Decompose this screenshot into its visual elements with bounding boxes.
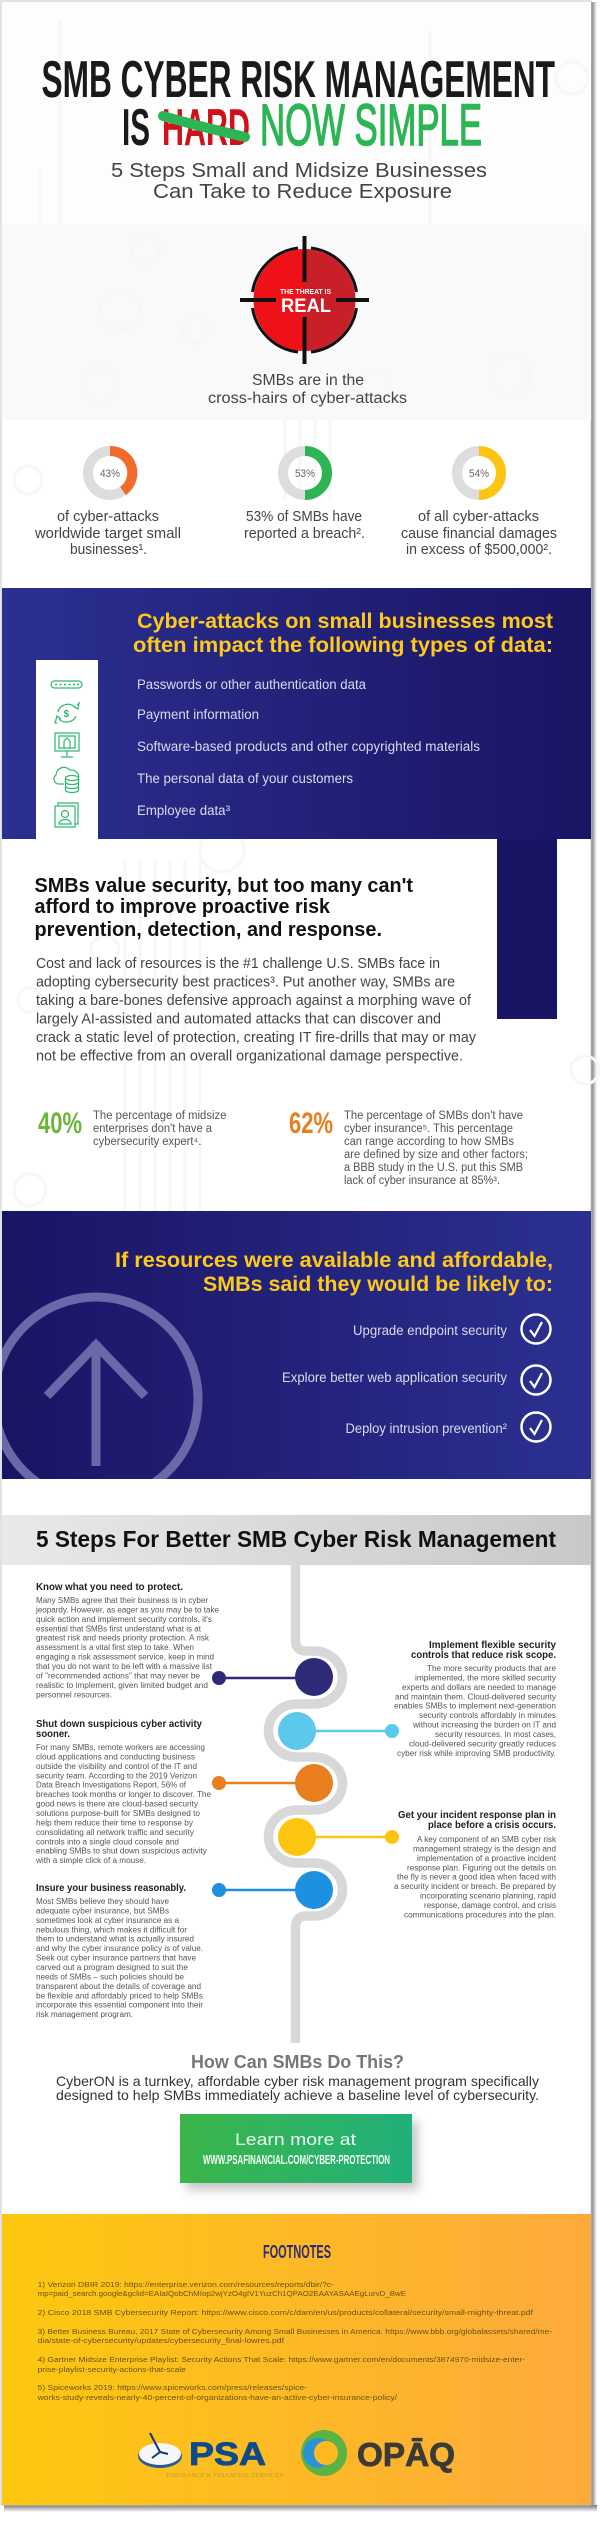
step: insure your business: Insure your business reasonably. [36, 1882, 186, 1894]
step body: and maintain them. Cloud-delivered security [395, 1692, 556, 1701]
title word: HARD crossed out [162, 99, 250, 157]
step body: of "recommended actions" that may never be [36, 1671, 201, 1680]
diagram: winding step path [212, 1565, 399, 2043]
heading band: 5 steps [2, 1515, 591, 1565]
data type list [137, 677, 480, 818]
step body: Many SMBs agree that their business is in cyber [36, 1596, 208, 1605]
node: step three [212, 1764, 333, 1802]
step body: communications procedures into the plan. [404, 1910, 556, 1919]
footnote 4: 4) Gartner Midsize Enterprise Playlist: Security Actions That Scale: https://www.gartner.com/en/documents/3874970-midsize-enter- [38, 2355, 526, 2364]
step: know what you need to protect: Know what you need to protect. [36, 1581, 183, 1593]
caption: in excess of $500,000². [406, 542, 552, 558]
stat: 43 percent [34, 451, 181, 558]
data type list: Software-based products and other copyrighted materials [137, 739, 480, 754]
step body: sometimes look at cyber insurance as a [36, 1916, 180, 1925]
footnote 5 [36, 2383, 398, 2402]
heading [133, 610, 553, 657]
text: CyberON description: CyberON is a turnkey, affordable cyber risk management program specifically [56, 2073, 539, 2089]
paragraph: cost and resources: adopting cybersecurity best practices³. Put another way, SMBs are [36, 974, 455, 990]
step: incident response plan: place before a crisis occurs. [428, 1819, 556, 1831]
caption: of cyber-attacks [57, 509, 159, 525]
step body: implemented, the more skilled security [415, 1673, 556, 1682]
step body: enabling SMBs to shut down suspicious activity [36, 1847, 207, 1856]
stat text [93, 1110, 226, 1148]
logo: OPAQ: OPĀQ [357, 2436, 455, 2473]
step body: Seek out cyber insurance partners that have [36, 1954, 197, 1963]
icon column [36, 660, 98, 839]
step body: greatest risk and needs priority protection. A risk [36, 1634, 210, 1643]
step body: consolidating all network traffic and security [36, 1828, 194, 1837]
caption: cause financial damages [401, 526, 557, 542]
panel: footnotes [2, 2214, 591, 2505]
step body [35, 1596, 220, 1699]
footnote 2: 2) Cisco 2018 SMB Cybersecurity Report: https://www.cisco.com/c/dam/en/us/products/collateral/security/small-mighty-threat.pdf [38, 2308, 534, 2317]
icon: up arrow in circle [0, 1297, 198, 1501]
subtitle: Can Take to Reduce Exposure [153, 181, 452, 203]
step body: essential that SMBs first understand what is at [36, 1624, 202, 1633]
step body: breaches took months or longer to discover. The [36, 1790, 212, 1799]
paragraph: cost and resources: Cost and lack of resources is the #1 challenge U.S. SMBs face in [36, 956, 440, 972]
step body [394, 1835, 557, 1919]
heading [115, 1249, 553, 1296]
stat text: The percentage of midsize [93, 1110, 226, 1122]
logo: PSA: PSA [189, 2436, 266, 2472]
step body: controls into a single cloud console and [36, 1837, 179, 1846]
step body: and why the cyber insurance policy is of value. [36, 1944, 203, 1953]
caption: 53% of SMBs have [246, 509, 362, 525]
footnote 1 [38, 2280, 406, 2298]
step body: carved out a program designed to suit the [36, 1963, 189, 1972]
step body [35, 1743, 212, 1865]
action: intrusion prevention: Deploy intrusion prevention² [346, 1421, 507, 1436]
footnote 3: dia/state-of-cybersecurity/updates/cybersecurity_final-lowres.pdf [38, 2336, 285, 2345]
caption: businesses¹. [70, 542, 147, 558]
step body: experts and dollars are needed to manage [402, 1683, 557, 1692]
stat text: The percentage of SMBs don't have [344, 1110, 523, 1122]
step body: nebulous thing, which makes it difficult for [36, 1925, 187, 1934]
step body: incorporate this essential component into their [36, 2001, 203, 2010]
step: implement flexible controls: Implement flexible security [429, 1639, 556, 1651]
step: know what you need to protect [35, 1581, 220, 1699]
action: intrusion prevention [346, 1412, 550, 1442]
title word: IS: IS [122, 99, 150, 157]
decorative navy bar [497, 839, 557, 1019]
step: incident response plan [394, 1809, 557, 1919]
step body: management strategy is the design and [413, 1844, 556, 1853]
caption [401, 509, 557, 558]
footnote 3 [38, 2327, 553, 2345]
paragraph: cost and resources: taking a bare-bones defensive approach against a morphing wave of [36, 993, 472, 1009]
step body: For many SMBs, remote workers are accessing [36, 1743, 205, 1752]
icon: target with threat is real [240, 236, 369, 364]
icon: payment: $ [64, 709, 70, 720]
footnote 5: works-study-reveals-nearly-40-percent-of-organizations-have-an-active-cyber-insurance-policy/ [36, 2393, 398, 2402]
caption [34, 509, 181, 558]
stat: 62 percent [289, 1107, 528, 1187]
donut: 54%: 54% [469, 468, 489, 480]
target caption: SMBs are in the [252, 372, 364, 389]
action: web application security: Explore better web application security [282, 1370, 507, 1385]
step: implement flexible controls: controls that reduce risk scope. [411, 1649, 556, 1661]
step body: Most SMBs believe they should have [36, 1897, 170, 1906]
icon: cloud database [54, 767, 79, 792]
icon: employee card [55, 803, 78, 827]
step body: security resources. In most cases, [435, 1730, 556, 1739]
stat: 54 percent [401, 451, 557, 558]
button: learn more: WWW.PSAFINANCIAL.COM/CYBER-PROTECTION [203, 2153, 390, 2167]
stat text: enterprises don't have a [93, 1123, 213, 1135]
step body: risk management program. [36, 2010, 133, 2019]
paragraph: cost and resources [36, 956, 477, 1064]
title [42, 51, 555, 158]
data type list: The personal data of your customers [137, 771, 353, 786]
step body: adequate cyber insurance, but SMBs [36, 1906, 169, 1915]
icon: password [51, 681, 82, 688]
heading: how can SMBs do this: How Can SMBs Do This? [191, 2052, 404, 2072]
button: learn more [180, 2114, 412, 2183]
step body: implementation of a proactive incident [417, 1854, 557, 1863]
node: step four [278, 1818, 399, 1856]
step body: cloud applications and conducting business [36, 1752, 195, 1761]
logo: PSA [138, 2433, 283, 2479]
paragraph: cost and resources: not be effective from an overall organizational damage perspective. [36, 1048, 463, 1064]
step: shut down suspicious activity: Shut down suspicious cyber activity [36, 1718, 202, 1730]
step body: Data Breach Investigations Report, 56% of [36, 1781, 187, 1790]
donut: 43%: 43% [100, 468, 120, 480]
step body: realistic to implement, given limited budget and [36, 1681, 208, 1690]
step: implement flexible controls [394, 1639, 557, 1758]
step body: assessment is a vital first step to take. When [36, 1643, 194, 1652]
step: shut down suspicious activity [35, 1718, 212, 1865]
paragraph: cost and resources: crack a static level of protection, creating IT fire-drills that may or may [36, 1030, 477, 1046]
stat: 40 percent: 40% [38, 1107, 82, 1140]
action: upgrade endpoint [353, 1314, 550, 1344]
step body: them to understand what is actually insured [36, 1935, 194, 1944]
node: step five [212, 1871, 333, 1909]
heading: Cyber-attacks on small businesses most [137, 610, 553, 633]
step body: enables SMBs to implement next-generation [394, 1702, 556, 1711]
step body: help them reduce their time to response by [36, 1818, 193, 1827]
subtitle [111, 160, 487, 203]
step body: be flexible and affordably priced to help SMBs [36, 1991, 203, 2000]
stat text: cyber insurance⁵. This percentage [344, 1123, 513, 1135]
step body: incorporating scenario planning, rapid [420, 1892, 556, 1901]
title word: HARD crossed out: HARD [162, 99, 250, 157]
stat: 40 percent [38, 1107, 226, 1148]
heading: If resources were available and affordable, [115, 1249, 553, 1272]
caption [244, 509, 365, 542]
logo: OPAQ [301, 2430, 455, 2476]
target caption: cross-hairs of cyber-attacks [208, 390, 407, 407]
logo: PSA: INSURANCE & FINANCIAL SERVICES [166, 2472, 283, 2479]
caption: of all cyber-attacks [418, 509, 539, 525]
heading: SMBs value security: SMBs value security, but too many can't [34, 875, 413, 897]
donut: 53%: 53% [295, 468, 315, 480]
step body: with a simple click of a mouse. [35, 1856, 146, 1865]
caption: reported a breach². [244, 526, 365, 542]
paragraph: cost and resources: largely AI-assisted and automated attacks that can discover and [36, 1012, 441, 1028]
data type list: Passwords or other authentication data [137, 677, 366, 692]
step body: jeopardy. However, as eager as you may be to take [35, 1605, 220, 1614]
icon: target with threat is real: REAL [281, 296, 331, 317]
icon: payment [55, 703, 79, 723]
step body: security team. According to the 2019 Verizon [36, 1771, 197, 1780]
stat text: can range according to how SMBs [344, 1136, 514, 1148]
caption: worldwide target small [34, 526, 181, 542]
stat text: a BBB study in the U.S. put this SMB [344, 1162, 523, 1174]
step body: outside the visibility and control of the IT and [36, 1762, 197, 1771]
node: step one [212, 1658, 333, 1696]
step body: solutions purpose-built for SMBs designed to [36, 1809, 201, 1818]
heading: SMBs said they would be likely to: [203, 1273, 553, 1296]
footnote 1: 1) Verizon DBIR 2019: https://enterprise.verizon.com/resources/reports/dbir/?c- [38, 2280, 335, 2289]
step body: a security incident or breach. Be prepared by [394, 1882, 556, 1891]
step body: The more security products that are [427, 1664, 557, 1673]
heading: often impact the following types of data: [133, 634, 553, 657]
step: incident response plan: Get your incident response plan in [398, 1809, 556, 1821]
step body: A key component of an SMB cyber risk [417, 1835, 557, 1844]
stat text: lack of cyber insurance at 85%³. [344, 1175, 500, 1187]
donut: 43% [88, 451, 132, 495]
stat text: are defined by size and other factors; [344, 1149, 528, 1161]
target caption [208, 372, 407, 407]
subtitle: 5 Steps Small and Midsize Businesses [111, 160, 487, 182]
heading: SMBs value security: prevention, detection, and response. [34, 919, 382, 941]
step body: needs of SMBs – such policies should be [36, 1972, 185, 1981]
step body: transparent about the details of coverage and [36, 1982, 201, 1991]
icon: target with threat is real: THE THREAT IS [280, 289, 331, 296]
footnote 3: 3) Better Business Bureau, 2017 State of Cybersecurity Among Small Businesses in America: https://www.bbb.org/globalassets/shared/me- [38, 2327, 553, 2336]
footnote 5: 5) Spiceworks 2019: https://www.spiceworks.com/press/releases/spice- [38, 2383, 308, 2392]
text: CyberON description [56, 2073, 539, 2103]
footnotes heading: FOOTNOTES [263, 2241, 331, 2262]
donut: 54% [457, 451, 501, 495]
stat text: cybersecurity expert⁴. [93, 1136, 202, 1148]
node: step two [278, 1712, 399, 1750]
step body: without increasing the burden on IT and [412, 1721, 556, 1730]
step body: security controls affordably in minutes [419, 1711, 556, 1720]
heading: SMBs value security [34, 875, 413, 941]
heading band: 5 steps: 5 Steps For Better SMB Cyber Risk Management [36, 1526, 556, 1552]
panel: data types [2, 588, 591, 839]
step body: engaging a risk assessment service, keep in mind [36, 1653, 214, 1662]
heading: SMBs value security: afford to improve proactive risk [34, 896, 331, 918]
stat text [344, 1110, 528, 1187]
footnote 4: prise-playlist-security-actions-that-scale [38, 2365, 186, 2374]
text: CyberON description: designed to help SMBs immediately achieve a baseline level of cybersecurity. [56, 2087, 539, 2103]
step body: cyber risk while improving SMB productivity. [397, 1749, 556, 1758]
step: insure your business [36, 1882, 203, 2019]
button: learn more: Learn more at [235, 2130, 356, 2149]
action: upgrade endpoint: Upgrade endpoint security [353, 1323, 507, 1338]
step body: good news is there are cloud-based security [36, 1800, 198, 1809]
step body: cloud-delivered security greatly reduces [409, 1739, 556, 1748]
panel: if resources were available [0, 1211, 591, 1501]
data type list: Payment information [137, 707, 259, 722]
step body: personnel resources. [36, 1690, 112, 1699]
stat: 53 percent [244, 451, 365, 542]
footnote 1: mp=paid_search.google&gclid=EAIaIQobChMIop2wjYzO4gIV1YuzCh1QPAO2EAAYASAAEgLurvD_BwE [38, 2289, 406, 2298]
step body: response plan. Figuring out the details on [407, 1863, 556, 1872]
step body [394, 1664, 557, 1758]
footnote 4 [38, 2355, 526, 2374]
icon: software monitor [55, 733, 79, 757]
stat: 62 percent: 62% [289, 1107, 333, 1140]
action: web application security [282, 1366, 550, 1394]
step: shut down suspicious activity: sooner. [36, 1728, 70, 1740]
step body: the fly is never a good idea when faced with [397, 1873, 556, 1882]
data type list: Employee data³ [137, 803, 230, 818]
step body: response, damage control, and crisis [424, 1901, 556, 1910]
step body: that you do not want to be left with a massive list [36, 1662, 213, 1671]
step body [36, 1897, 203, 2019]
step body: quick action and implement security controls, it's [36, 1615, 212, 1624]
